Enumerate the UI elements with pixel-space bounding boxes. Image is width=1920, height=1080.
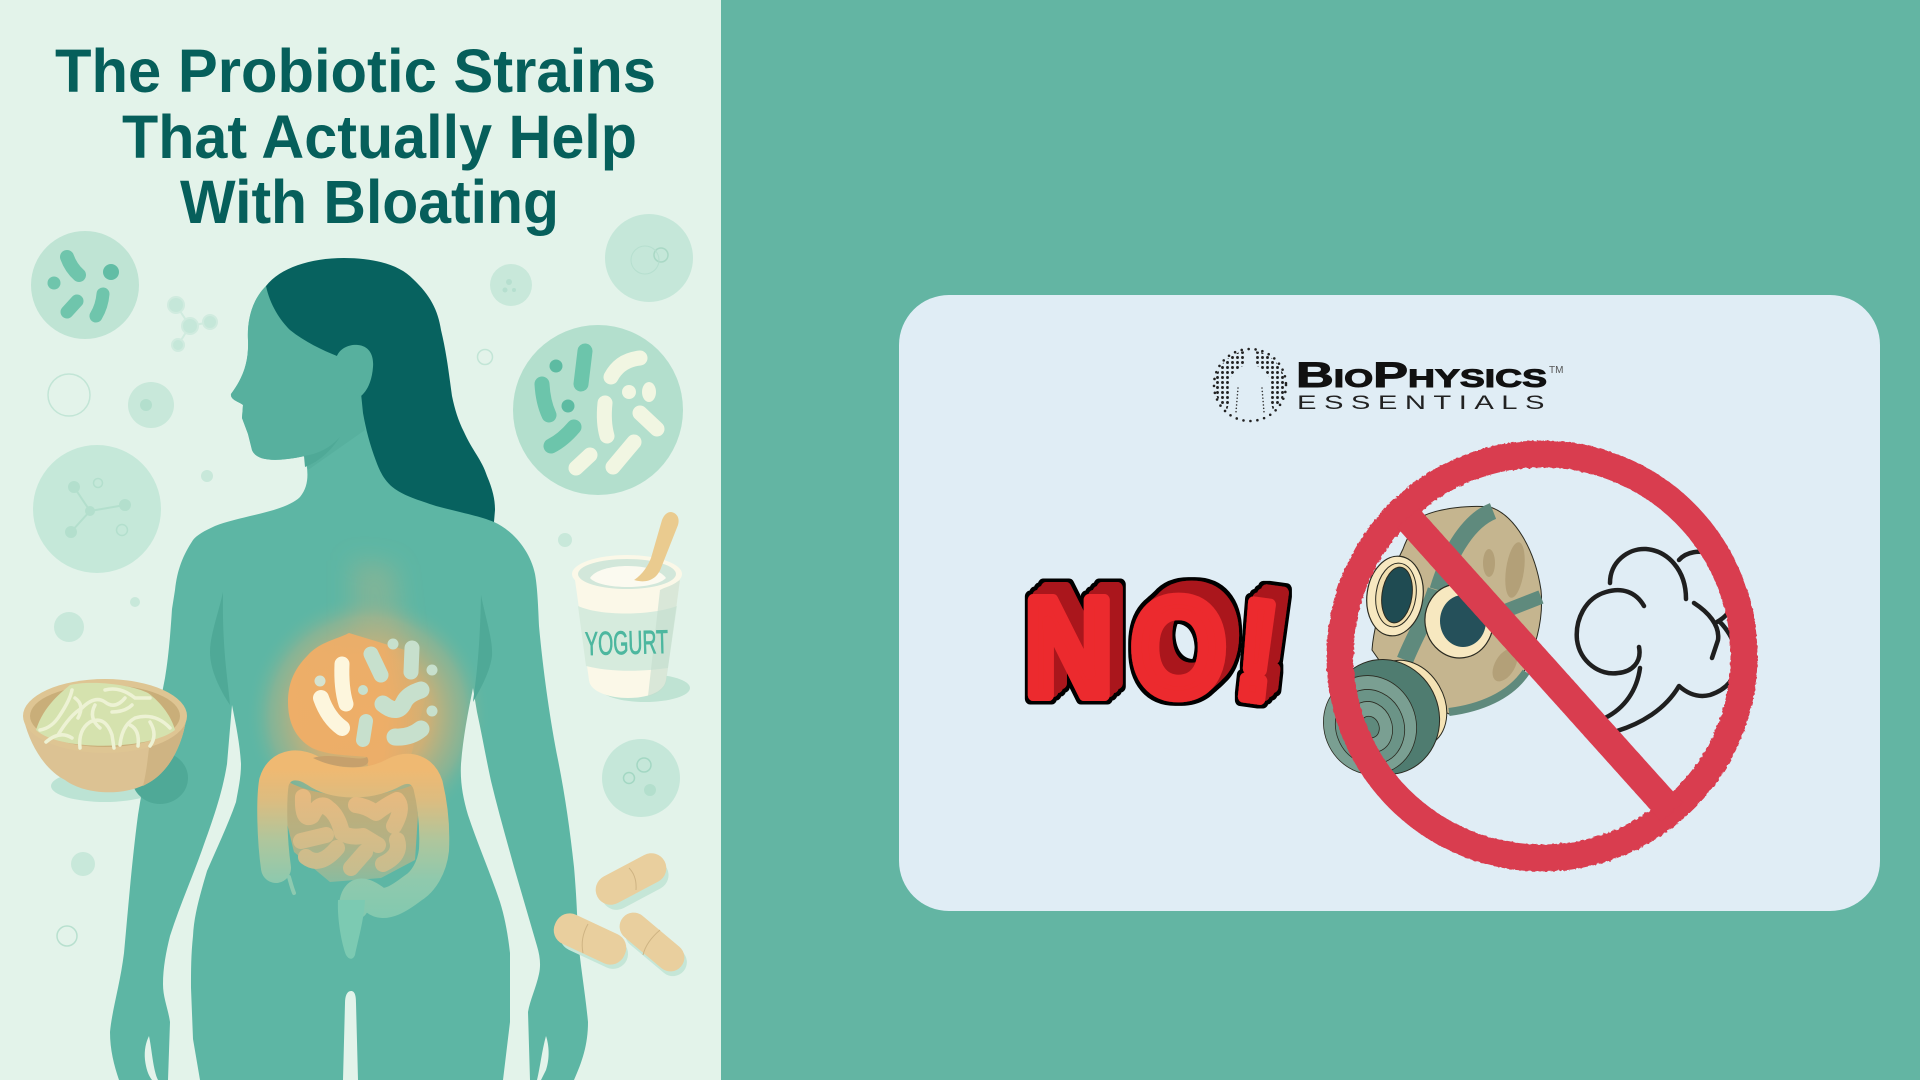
prohibition sign	[1340, 454, 1744, 858]
microbe circle top right	[605, 214, 693, 302]
title	[55, 37, 656, 236]
large intestine	[272, 765, 434, 905]
spoon	[634, 512, 679, 581]
ear	[337, 345, 373, 396]
gap: left arm and torso	[163, 705, 241, 1080]
logo: BioPhysics Essentials	[1214, 349, 1563, 421]
gap: right arm and torso	[461, 688, 540, 1080]
rectum	[338, 900, 365, 959]
arm crease shades	[210, 592, 230, 705]
esophagus glow	[352, 560, 405, 650]
title: The Probiotic Strains	[55, 37, 656, 105]
title: With Bloating	[180, 168, 559, 236]
stomach	[288, 633, 425, 766]
mask filter	[1309, 643, 1457, 791]
gaps: fingers	[145, 1036, 158, 1080]
mask straps	[1405, 511, 1541, 712]
capsule pills	[549, 848, 693, 982]
NO! lettering: NO!	[1025, 570, 1285, 730]
large bacteria circle	[513, 325, 683, 495]
body	[110, 286, 588, 1080]
logo subtitle: ESSENTIALS	[1297, 392, 1552, 414]
mask helmet	[1372, 506, 1542, 714]
woman silhouette	[110, 286, 588, 1080]
mask filter collar	[1354, 646, 1462, 762]
panel: no gas card	[899, 295, 1880, 911]
neck shadow	[304, 437, 340, 467]
logo dotted body mark	[1214, 349, 1286, 421]
stomach fold	[313, 756, 368, 767]
mask stains	[1483, 541, 1528, 686]
mask right eye	[1420, 580, 1498, 662]
microbe circle top left	[31, 231, 139, 339]
bowl of sauerkraut	[23, 679, 188, 804]
gap: between legs	[343, 991, 358, 1080]
stomach glow	[246, 593, 490, 837]
mask left eye	[1362, 552, 1428, 640]
small intestine loops	[301, 797, 400, 868]
shadow under bowl	[51, 770, 159, 802]
logo wordmark: BioPhysics	[1296, 356, 1547, 395]
yogurt label: YOGURT	[585, 623, 669, 662]
lower left microbe circle	[33, 445, 161, 573]
head shade	[231, 286, 365, 470]
intestines background	[285, 781, 418, 882]
cloud of gas	[1577, 549, 1737, 731]
floating dots and rings	[48, 350, 680, 946]
stomach bacteria	[314, 638, 438, 740]
title: That Actually Help	[122, 103, 637, 171]
hair	[266, 258, 495, 522]
logo trademark: TM	[1549, 365, 1563, 376]
yogurt cup	[572, 512, 690, 702]
appendix	[289, 877, 294, 893]
gas mask	[1309, 506, 1542, 791]
molecule icon	[168, 297, 217, 351]
panel: probiotic illustration	[0, 0, 721, 1080]
small microbe circle	[490, 264, 532, 306]
